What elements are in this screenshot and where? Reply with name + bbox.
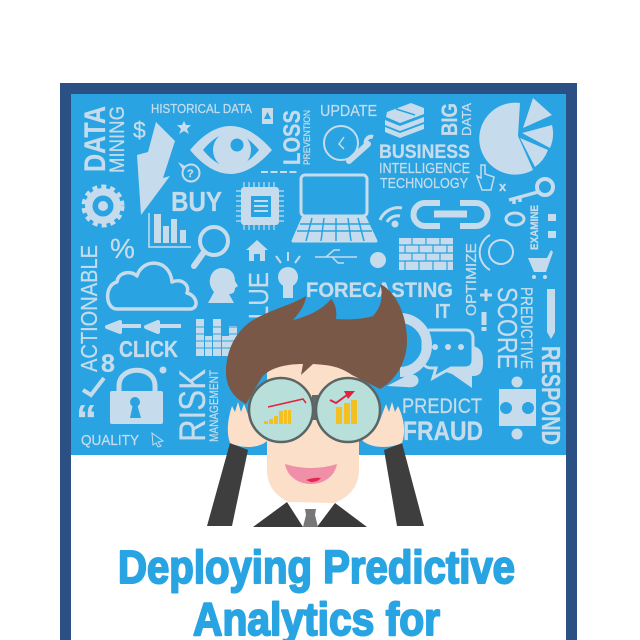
icon: comet <box>387 375 419 387</box>
word: MINING: MINING <box>106 106 129 173</box>
icon: clock and wrench <box>324 126 373 161</box>
word: EXAMINE: EXAMINE <box>529 205 541 250</box>
icon: bar chart <box>149 213 191 247</box>
icon: pointing hand <box>477 165 494 190</box>
word: PREVENTION: PREVENTION <box>302 110 312 165</box>
icon: percent: % <box>110 233 135 264</box>
icon: gear <box>84 186 122 226</box>
icon: chain link <box>414 203 488 226</box>
icon: coin <box>506 213 524 225</box>
icon: partly hidden globe <box>400 318 427 372</box>
icon: speech bubbles <box>423 330 483 388</box>
word: UPDATE: UPDATE <box>320 103 377 120</box>
word: RESPOND: RESPOND <box>536 346 566 445</box>
icon: check mark <box>83 378 104 395</box>
icon: laptop <box>293 175 376 241</box>
icon: x mark: x <box>499 179 507 194</box>
icon: chip <box>236 182 284 230</box>
icon: exclamation <box>482 312 486 331</box>
left lens chart <box>264 399 306 424</box>
icon: plus <box>480 289 492 301</box>
icon: padlock <box>110 370 163 424</box>
icon: house <box>246 240 268 261</box>
word: VALUE: VALUE <box>243 272 274 350</box>
title <box>118 541 515 640</box>
binocular bridge <box>312 395 320 420</box>
right lens <box>316 378 380 442</box>
word: IT: IT <box>435 301 450 323</box>
icon: pie chart <box>479 98 553 175</box>
icon: cloud <box>108 263 196 309</box>
icon: cursor <box>152 433 163 447</box>
icon: usb <box>315 250 357 263</box>
icon: eye <box>190 126 272 174</box>
icon: question bubble: ? <box>187 168 194 180</box>
word: ACTIONABLE: ACTIONABLE <box>76 245 102 372</box>
icon: badge <box>370 252 386 268</box>
icon: money stack <box>385 103 424 138</box>
icon: star <box>177 121 191 134</box>
icon: quote marks: “ <box>76 396 97 443</box>
word: SCORE: SCORE <box>492 287 523 369</box>
smile <box>285 464 337 484</box>
tie <box>303 509 318 527</box>
icon: left arrows <box>107 322 181 332</box>
icon: small tag <box>262 108 273 124</box>
icon: squares <box>548 214 556 238</box>
hair <box>226 284 407 404</box>
icon: dashes <box>261 171 298 173</box>
panel: blue word cloud <box>71 94 566 455</box>
icon: brick wall <box>399 238 453 270</box>
icon: magnifier <box>194 227 228 266</box>
word: FORECASTING: FORECASTING <box>306 279 453 302</box>
face <box>267 360 359 507</box>
word: CLICK: CLICK <box>119 336 178 362</box>
icon: equalizer <box>196 319 238 356</box>
right arm <box>384 443 424 526</box>
left hand <box>228 402 268 447</box>
word: LOSS: LOSS <box>279 110 306 165</box>
icon: globe ring <box>480 235 513 270</box>
icon: pencil <box>547 289 555 339</box>
title line 1: Deploying Predictive <box>118 541 515 593</box>
icon: person head <box>208 268 238 303</box>
word: RISK: RISK <box>172 369 213 442</box>
word: HISTORICAL DATA: HISTORICAL DATA <box>151 102 253 116</box>
number: 8: 8 <box>101 350 115 378</box>
word: DATA: DATA <box>79 106 112 172</box>
icon: light bulb <box>276 252 300 298</box>
icon: lightning <box>137 122 175 215</box>
icon: shopping cart <box>528 250 553 279</box>
shirt collar <box>287 502 335 527</box>
word: BUY: BUY <box>171 186 222 217</box>
word: BIG: BIG <box>437 103 462 136</box>
icon: question bubble <box>178 162 200 182</box>
white lower panel <box>71 94 566 640</box>
suit <box>253 502 367 527</box>
icon: dollar: $ <box>133 117 146 143</box>
right hand <box>362 402 404 447</box>
word: PREDICT: PREDICT <box>402 395 482 418</box>
word: INTELLIGENCE: INTELLIGENCE <box>379 160 470 177</box>
illustration: man with binoculars <box>207 284 424 527</box>
icon: wifi <box>380 208 402 226</box>
word: BUSINESS: BUSINESS <box>379 142 470 163</box>
word: QUALITY: QUALITY <box>81 433 139 449</box>
icon: puzzle piece <box>499 376 536 440</box>
icon: dot <box>160 366 166 374</box>
navy frame <box>60 83 577 640</box>
icon: key <box>509 179 553 204</box>
word: TECHNOLOGY: TECHNOLOGY <box>380 175 468 192</box>
word: PREDICTIVE: PREDICTIVE <box>517 287 536 369</box>
word: MANAGEMENT: MANAGEMENT <box>207 369 221 442</box>
word: OPTIMIZE: OPTIMIZE <box>463 243 480 316</box>
left arm <box>207 443 248 526</box>
right lens chart <box>330 391 357 424</box>
word: DATA small: DATA <box>459 103 474 136</box>
left lens <box>249 378 313 442</box>
word: FRAUD: FRAUD <box>403 416 483 446</box>
